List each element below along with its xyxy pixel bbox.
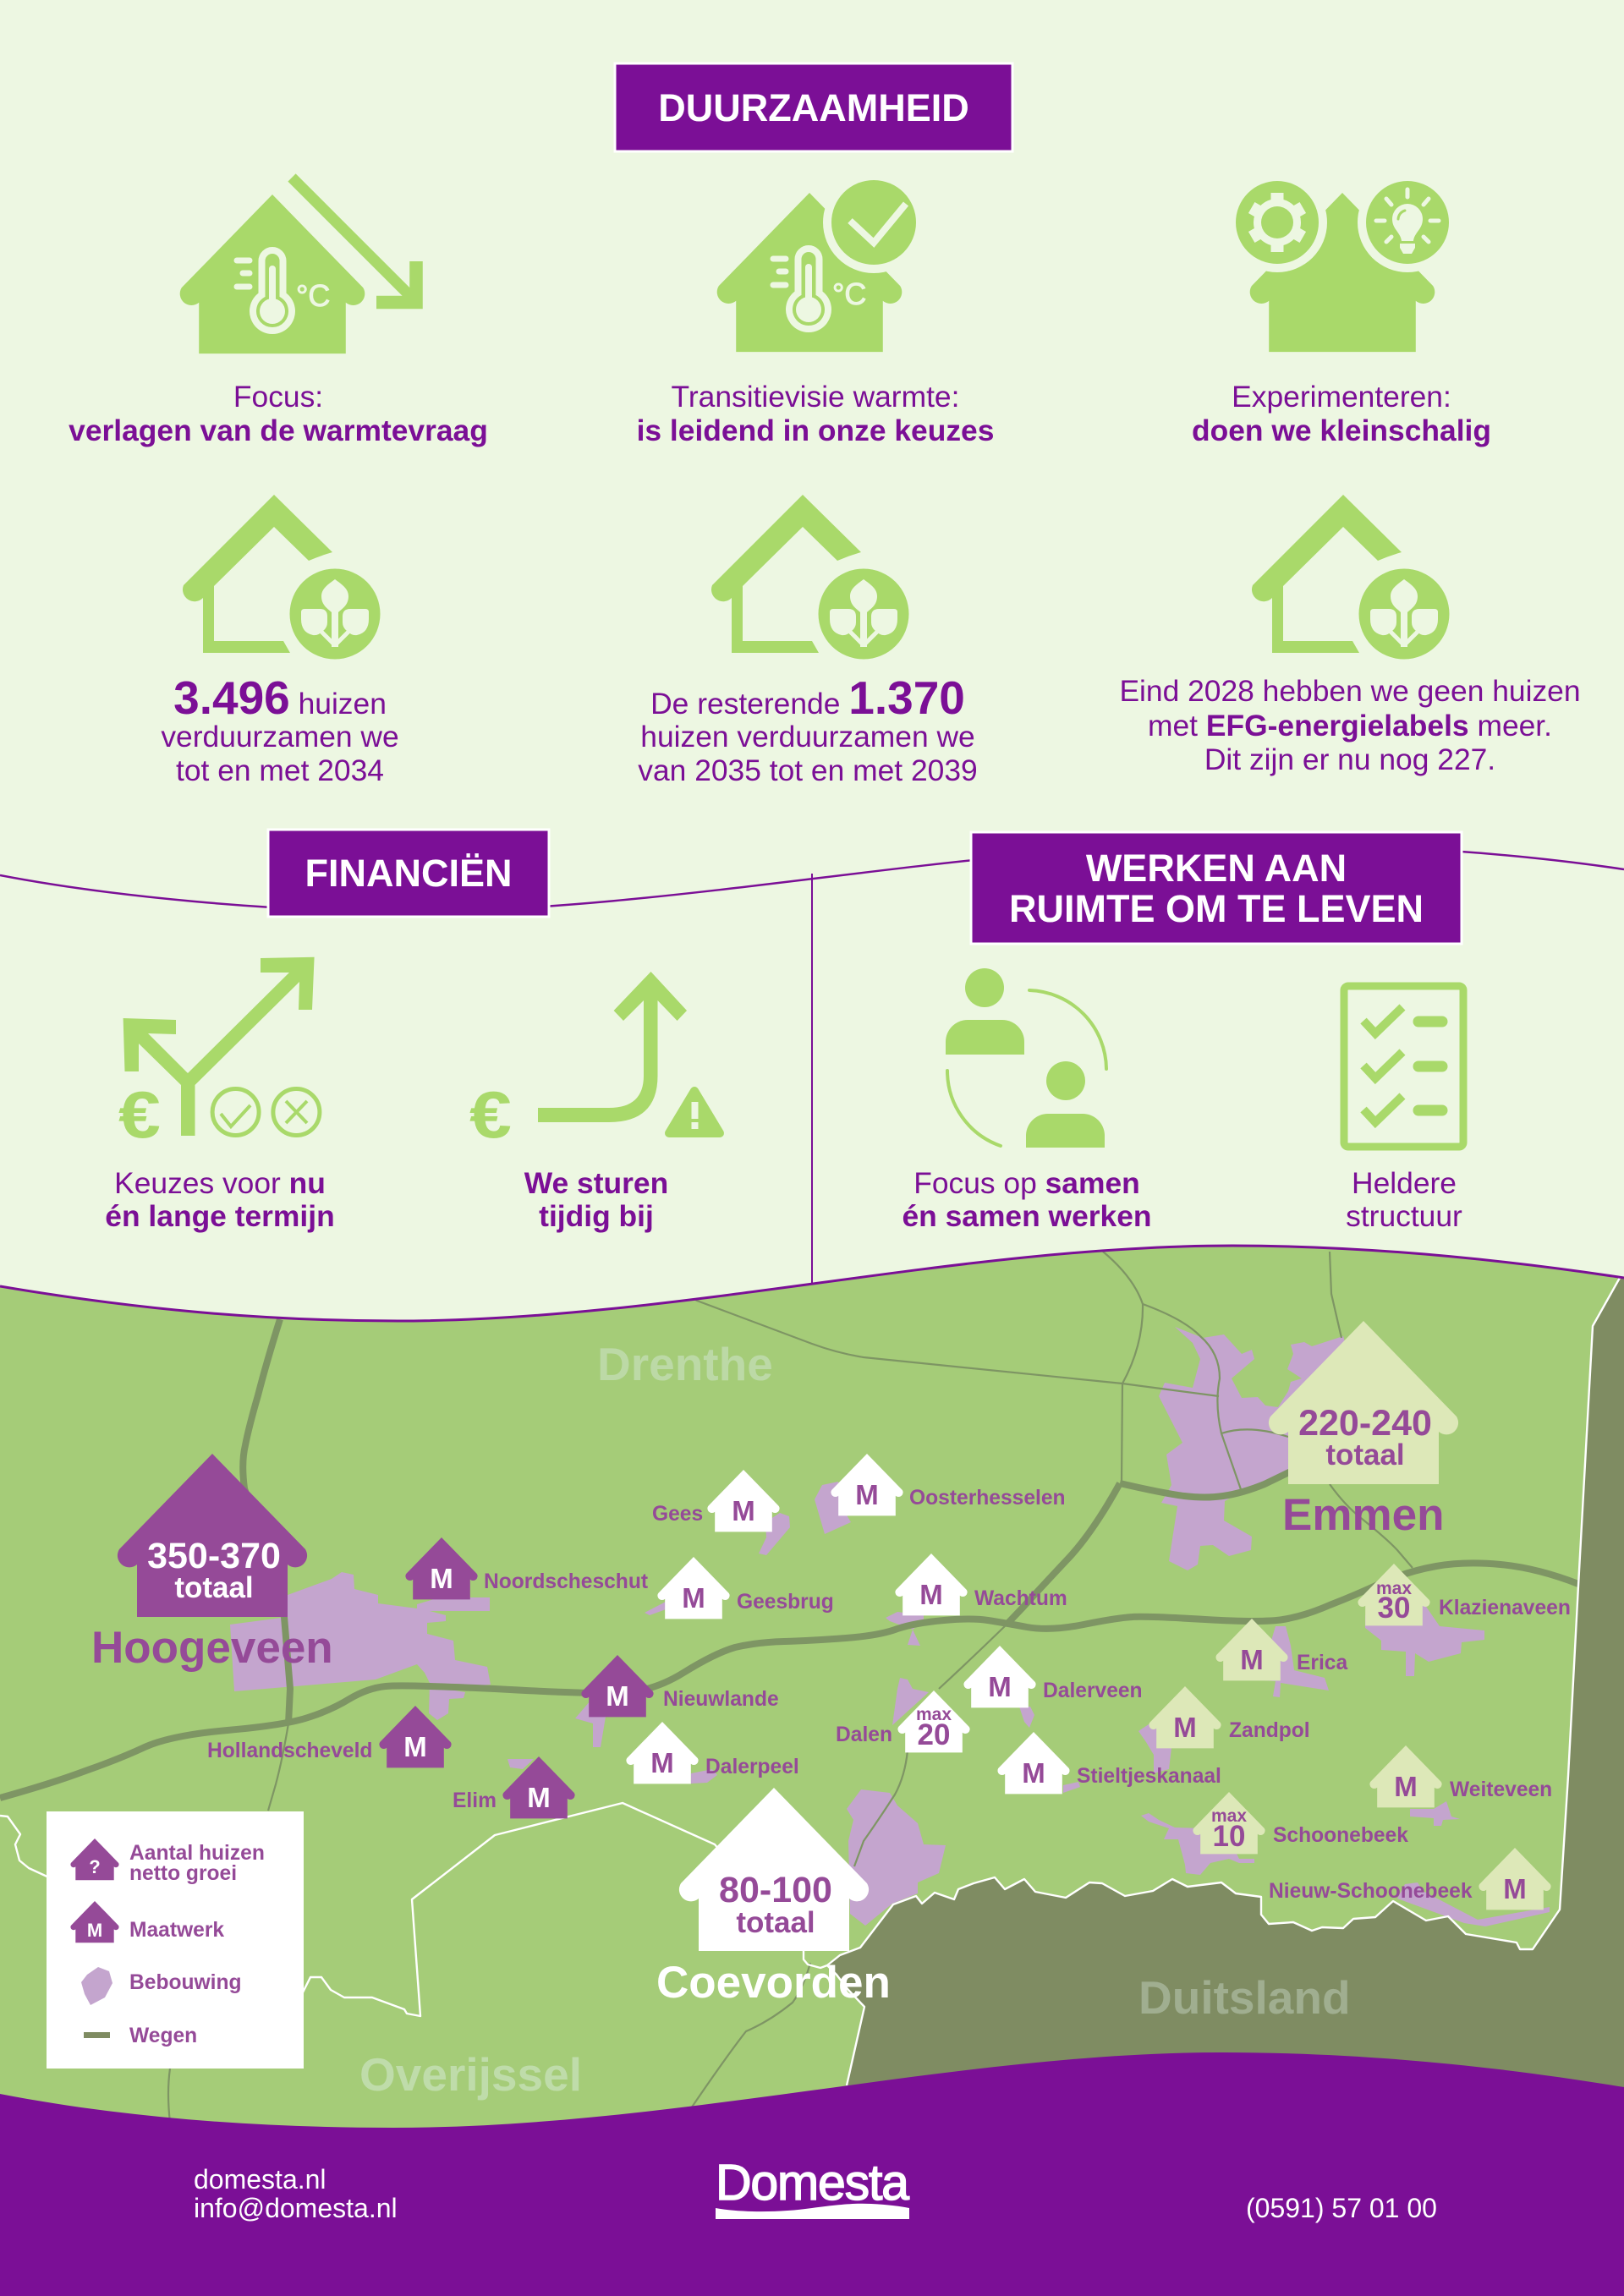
text: transitievisie: is leidend in onze keuzes [637,414,994,447]
house: Klazienaveen: Klazienaveen [1439,1597,1571,1619]
house: Emmen: Emmen [1282,1490,1444,1540]
icon: samen werken people [946,968,1106,1148]
icon: house with gear and lightbulb [1227,173,1457,352]
house: Zandpol: Zandpol [1229,1719,1310,1742]
footer contact: domesta.nl [194,2164,326,2195]
icon: house temperature down: °C [296,278,330,313]
section divider curve [0,844,1624,912]
house: Wachtum [895,1553,1067,1615]
text: experimenteren: Experimenteren: [1232,380,1451,414]
house: Coevorden: totaal [736,1906,815,1939]
icon: keuzes arrows: € [118,1077,161,1152]
text: focus op samen: én samen werken [902,1199,1152,1233]
icon: keuzes arrows [118,957,320,1152]
house: Hollandscheveld: M [403,1731,427,1762]
label: Duitsland: Duitsland [1138,1971,1351,2024]
house: Dalerpeel: Dalerpeel [705,1756,799,1778]
borders [0,1278,1620,2085]
house: Dalen: 20 [918,1718,950,1751]
map top curve [0,1246,1624,1321]
text: 3.496 huizen: verduurzamen we [161,720,399,753]
house: Hollandscheveld: Hollandscheveld [207,1740,372,1762]
house: Wachtum: M [919,1579,943,1610]
house: Stieltjeskanaal: Stieltjeskanaal [1077,1765,1221,1788]
house: Elim: Elim [453,1789,497,1812]
footer phone: (0591) 57 01 00 [1246,2193,1437,2223]
house: Hoogeveen: Hoogeveen [91,1623,333,1673]
icon: checklist [1344,986,1463,1147]
house: Noordscheschut: Noordscheschut [484,1570,648,1593]
heading: Werken aan ruimte om te leven [971,832,1462,944]
heading: Werken aan ruimte om te leven: WERKEN AAN [1086,847,1347,890]
heading: Financiën [268,830,549,917]
house: Elim [453,1756,575,1818]
text: EFG-energielabels: Eind 2028 hebben we geen huizen [1119,674,1581,708]
house: Weiteveen: M [1394,1771,1418,1802]
house: Nieuw-Schoonebeek: M [1503,1873,1527,1904]
house: Oosterhesselen: M [855,1479,879,1510]
house: Stieltjeskanaal [997,1732,1221,1794]
legend: Maatwerk [129,1919,224,1942]
text: we sturen: tijdig bij [539,1199,654,1233]
legend: Bebouwing [129,1971,242,1994]
house: Gees: M [732,1495,755,1526]
house: Hoogeveen: 350-370 [147,1536,281,1576]
house: Geesbrug: Geesbrug [737,1591,834,1614]
house: Klazienaveen: 30 [1378,1592,1410,1625]
footer contact: info@domesta.nl [194,2193,398,2223]
house: Klazienaveen [1358,1564,1571,1625]
house: Oosterhesselen: Oosterhesselen [909,1487,1066,1510]
legend [47,1811,304,2069]
icon: house with plant 2 [711,495,908,660]
text: 3.496 huizen: 3.496 huizen [173,671,387,724]
footer band [0,2052,1624,2296]
house: Nieuwlande [581,1655,779,1717]
legend: ? [89,1856,101,1877]
house: Stieltjeskanaal: M [1022,1757,1045,1789]
house: Wachtum: Wachtum [974,1587,1067,1610]
icon: bijsturen arrow: € [469,1077,512,1152]
text: EFG-energielabels: Dit zijn er nu nog 227. [1204,743,1495,776]
house: Schoonebeek: max [1211,1806,1247,1826]
map [0,1235,1624,2148]
heading: Duurzaamheid [615,63,1012,151]
house: Noordscheschut [405,1537,648,1599]
house: Dalerpeel [626,1722,799,1784]
house: Dalerveen: M [988,1671,1012,1702]
text: focus op samen: Focus op samen [914,1166,1140,1200]
text: resterende 1.370: van 2035 tot en met 2039 [638,753,978,787]
house: Nieuwlande: Nieuwlande [663,1688,779,1711]
house: Schoonebeek: Schoonebeek [1273,1824,1408,1847]
icon: house with check [717,172,924,352]
legend: M [87,1920,102,1941]
text: heldere structuur: Heldere [1352,1166,1457,1200]
house: Dalen: max [916,1705,952,1724]
house: Elim: M [527,1782,551,1813]
text: resterende 1.370: huizen verduurzamen we [640,720,975,753]
house: Weiteveen [1369,1745,1552,1807]
text: EFG-energielabels: met EFG-energielabels meer. [1148,709,1552,743]
house: Schoonebeek: 10 [1213,1820,1245,1853]
icon: house temperature down [180,178,416,353]
text: 3.496 huizen: tot en met 2034 [176,753,384,787]
roads [0,1252,1578,2123]
label: Overijssel: Overijssel [359,2048,582,2101]
house: Emmen: totaal [1325,1438,1405,1471]
house: Nieuw-Schoonebeek [1269,1848,1551,1910]
house: Klazienaveen: max [1376,1579,1412,1598]
vertical divider [811,874,813,1285]
text: keuzes: Keuzes voor nu [114,1166,326,1200]
house: Coevorden: 80-100 [719,1870,832,1910]
house: Hoogeveen [91,1454,333,1673]
house: Erica: M [1240,1644,1264,1675]
text: focus: verlagen van de warmtevraag [69,414,488,447]
house: Noordscheschut: M [430,1563,453,1594]
house: Coevorden [656,1788,891,2008]
legend: netto groei [129,1862,237,1885]
region: Duitsland [827,1269,1624,2140]
house: Zandpol: M [1173,1712,1197,1743]
house: Emmen [1269,1321,1458,1540]
house: Dalerveen: Dalerveen [1043,1680,1143,1702]
house: Dalerveen [963,1646,1143,1707]
house: Zandpol [1149,1686,1310,1748]
heading: Duurzaamheid: DUURZAAMHEID [658,86,969,129]
built-up areas [230,1327,1550,1926]
house: Dalen [836,1690,970,1752]
text: we sturen: We sturen [524,1166,668,1200]
house: Emmen: 220-240 [1298,1403,1432,1444]
house: Nieuw-Schoonebeek: Nieuw-Schoonebeek [1269,1880,1473,1903]
text: transitievisie: Transitievisie warmte: [672,380,959,414]
text: keuzes: én lange termijn [105,1199,335,1233]
house: Gees [652,1470,780,1532]
house: Hoogeveen: totaal [174,1571,254,1604]
house: Gees: Gees [652,1503,703,1526]
legend: Wegen [129,2025,197,2047]
house: Erica [1215,1619,1347,1680]
house: Nieuwlande: M [606,1680,629,1712]
icon: house with check: °C [832,277,866,311]
icon: bijsturen arrow [469,972,720,1152]
house: Dalerpeel: M [650,1747,674,1778]
house: Coevorden: Coevorden [656,1958,891,2008]
house: Erica: Erica [1297,1652,1347,1674]
heading: Werken aan ruimte om te leven: RUIMTE OM TE LEVEN [1009,887,1424,930]
text: focus: Focus: [233,380,323,414]
label: Drenthe: Drenthe [597,1338,773,1390]
icon: house with plant 1 [183,495,381,660]
icon: house with plant 3 [1252,495,1450,660]
text: resterende 1.370: De resterende 1.370 [650,671,965,724]
heading: Financiën: FINANCIËN [304,852,513,895]
house: Weiteveen: Weiteveen [1450,1778,1552,1801]
legend: Aantal huizen [129,1842,265,1865]
house: Geesbrug: M [682,1582,705,1614]
house: Hollandscheveld [207,1706,452,1767]
text: experimenteren: doen we kleinschalig [1192,414,1491,447]
logo: Domesta: Domesta [716,2155,909,2211]
house: Geesbrug [657,1557,834,1619]
house: Oosterhesselen [831,1454,1066,1515]
house: Dalen: Dalen [836,1723,892,1746]
text: heldere structuur: structuur [1346,1199,1462,1233]
house: Schoonebeek [1193,1792,1408,1854]
